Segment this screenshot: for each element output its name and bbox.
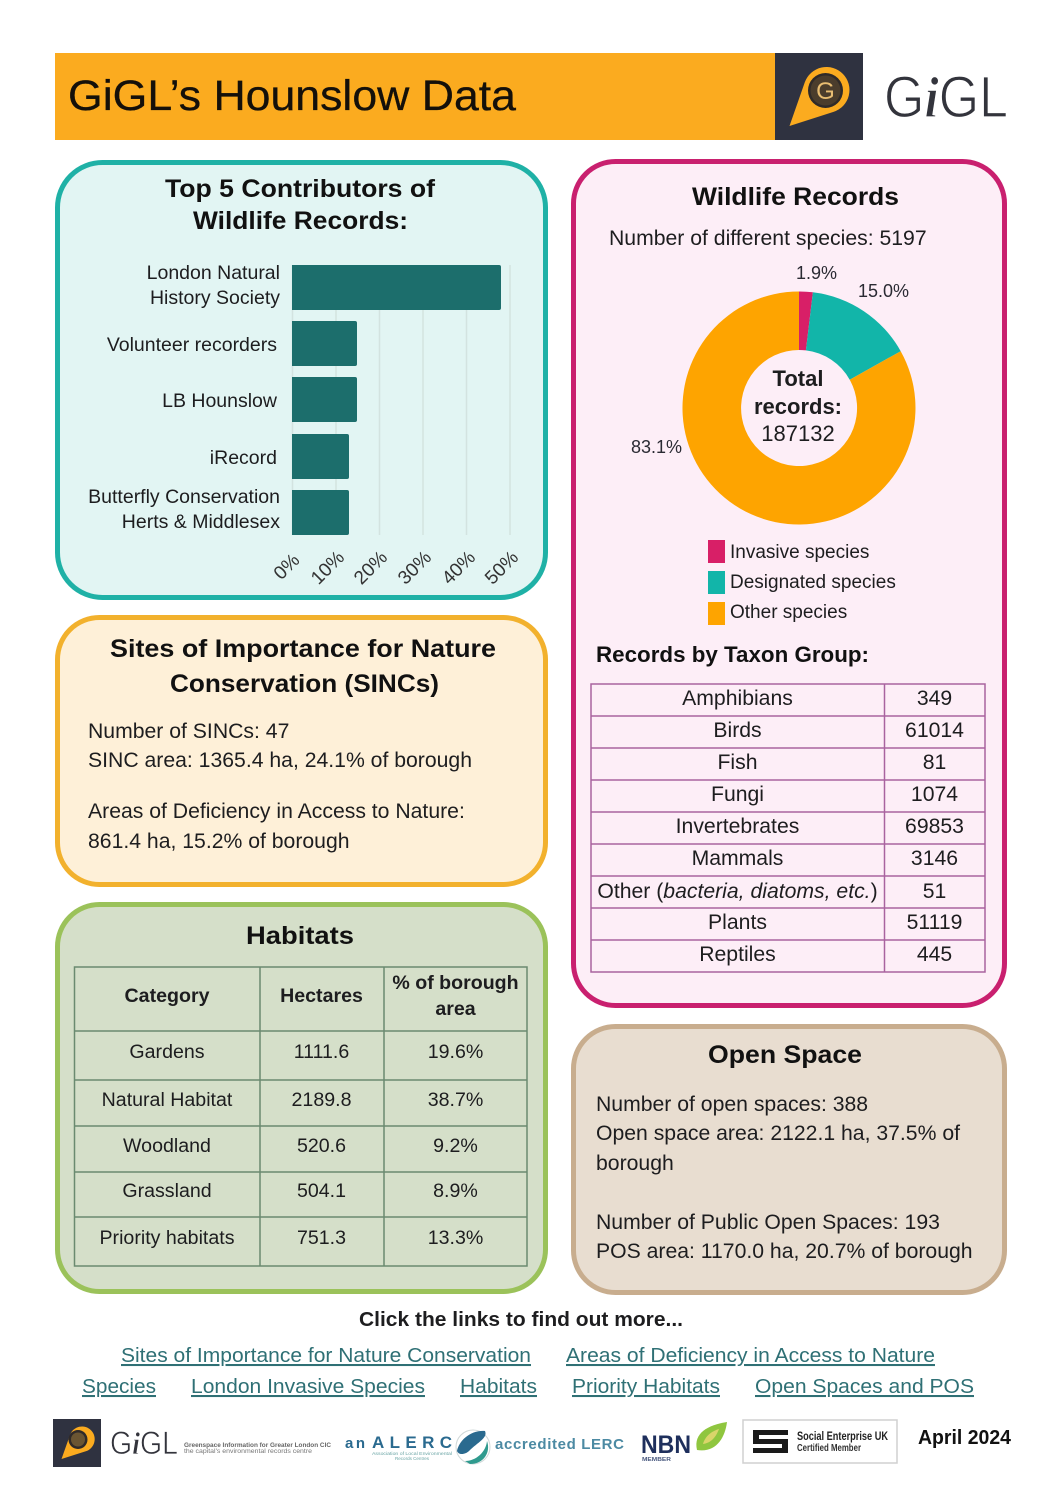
icon: GiGL map pin logo: G — [816, 78, 835, 105]
donut chart: records by species type: 15.0% — [858, 281, 909, 301]
link list: Areas of Deficiency in Access to Nature — [566, 1344, 935, 1367]
donut chart: records by species type: Total — [773, 366, 823, 391]
text: open space statistics: Number of open spaces: 388 — [596, 1093, 868, 1116]
legend: Designated species — [730, 572, 896, 593]
links heading: Click the links to find out more... — [359, 1309, 683, 1331]
bar chart: contributors: iRecord — [210, 447, 277, 469]
table: habitats: 751.3 — [297, 1227, 346, 1249]
donut chart: records by species type — [631, 263, 915, 524]
table: habitats: 19.6% — [428, 1041, 483, 1063]
table: habitats: 8.9% — [433, 1180, 478, 1202]
bar chart: contributors: Volunteer recorders — [107, 334, 277, 356]
table: habitats: area — [435, 998, 477, 1020]
logo: ALERC accreditation: Records Centres — [395, 1456, 430, 1461]
table: habitats: 504.1 — [297, 1180, 346, 1202]
table: habitats — [74, 967, 527, 1266]
heading: open space: Open Space — [708, 1041, 862, 1069]
logo: small GiGL wordmark: GiGL — [110, 1425, 178, 1461]
table: taxon groups: Invertebrates — [676, 815, 799, 838]
heading: SINCs: Conservation (SINCs) — [170, 670, 439, 698]
logo: small GiGL wordmark: the capital's environmental records centre — [184, 1449, 313, 1455]
table: taxon groups: 61014 — [905, 719, 964, 742]
link list: Sites of Importance for Nature Conservation — [121, 1344, 531, 1367]
link list: Open Spaces and POS — [755, 1375, 974, 1398]
logo: Social Enterprise UK: Certified Member — [797, 1443, 861, 1454]
logo: Social Enterprise UK — [743, 1420, 897, 1463]
link list — [82, 1344, 974, 1398]
legend — [708, 540, 896, 625]
bar chart: contributors: 20% — [350, 547, 392, 589]
logo: NBN member — [641, 1422, 727, 1463]
logo: ALERC accreditation: an — [345, 1435, 365, 1452]
heading: top 5 contributors: Wildlife Records: — [193, 207, 408, 235]
logo: GiGL wordmark: GiGL — [884, 65, 1008, 130]
table: habitats: Woodland — [123, 1135, 211, 1157]
panel: top 5 contributors — [58, 162, 546, 598]
text: SINC statistics: Number of SINCs: 47 — [88, 720, 289, 743]
date: April 2024 — [918, 1427, 1012, 1449]
table: habitats: Category — [125, 985, 210, 1007]
bar chart: contributors: 30% — [394, 547, 436, 589]
legend: Invasive species — [730, 542, 869, 563]
table: habitats: Priority habitats — [99, 1227, 235, 1249]
table: habitats: % of borough — [392, 972, 519, 994]
logo: Social Enterprise UK: Social Enterprise UK — [797, 1431, 889, 1443]
title: GiGL’s Hounslow Data — [68, 72, 516, 120]
table: taxon groups: 445 — [917, 943, 952, 966]
icon: small GiGL pin logo — [53, 1419, 101, 1467]
table: taxon groups: 81 — [923, 751, 946, 774]
bar chart: contributors: 10% — [307, 547, 349, 589]
table: habitats: Grassland — [122, 1180, 212, 1202]
donut chart: records by species type: records: — [754, 394, 842, 419]
text: SINC statistics: Areas of Deficiency in Access to Nature: — [88, 800, 465, 823]
logo: ALERC accreditation — [345, 1430, 624, 1464]
panel: SINCs — [58, 618, 546, 884]
heading: SINCs: Sites of Importance for Nature — [110, 635, 496, 663]
table: taxon groups: Mammals — [692, 847, 783, 870]
donut chart: records by species type: 187132 — [761, 421, 835, 446]
icon: GiGL map pin logo — [775, 53, 863, 140]
table: taxon groups: 3146 — [911, 847, 958, 870]
heading: top 5 contributors: Top 5 Contributors of — [165, 175, 436, 203]
bar chart: contributors: 0% — [270, 550, 304, 584]
panel: open space — [574, 1026, 1004, 1292]
bar chart: contributors — [88, 262, 523, 589]
heading: habitats: Habitats — [246, 922, 354, 950]
table: habitats: Natural Habitat — [102, 1089, 233, 1111]
heading: top 5 contributors — [165, 175, 436, 235]
table: taxon groups: 1074 — [911, 783, 958, 806]
text: species count: Number of different species: 5197 — [609, 227, 927, 250]
table: habitats: Gardens — [129, 1041, 205, 1063]
logo: ALERC accreditation: ALERC — [372, 1433, 452, 1452]
footer logos — [53, 1419, 1012, 1467]
logo: ALERC accreditation: accredited LERC — [495, 1436, 624, 1453]
table: taxon groups: Amphibians — [682, 687, 793, 710]
panel: habitats — [58, 904, 546, 1292]
logo: small GiGL wordmark — [110, 1425, 332, 1461]
text: open space statistics: borough — [596, 1152, 674, 1175]
link list: London Invasive Species — [191, 1375, 425, 1398]
donut chart: records by species type: 83.1% — [631, 437, 682, 457]
bar chart: contributors: LB Hounslow — [162, 390, 278, 412]
heading: wildlife records: Wildlife Records — [692, 183, 899, 211]
links section — [82, 1309, 974, 1398]
table: habitats: 38.7% — [428, 1089, 483, 1111]
legend: Other species — [730, 602, 847, 623]
logo: ALERC accreditation: Association of Local Environmental — [372, 1451, 452, 1456]
bar chart: contributors: History Society — [150, 287, 280, 309]
table: taxon groups: Fungi — [711, 783, 764, 806]
table: taxon groups: 349 — [917, 687, 952, 710]
table: taxon groups: Plants — [708, 911, 767, 934]
text: SINC statistics: 861.4 ha, 15.2% of borough — [88, 830, 350, 853]
bar chart: contributors: Butterfly Conservation — [88, 486, 280, 508]
bar chart: contributors: London Natural — [147, 262, 280, 284]
table: taxon groups: 51 — [923, 880, 946, 903]
text: SINC statistics — [88, 720, 472, 853]
link list: Priority Habitats — [572, 1375, 720, 1398]
heading: SINCs — [110, 635, 496, 698]
table: habitats: 13.3% — [428, 1227, 483, 1249]
table: habitats: 9.2% — [433, 1135, 478, 1157]
table: habitats: 1111.6 — [294, 1041, 349, 1063]
bar chart: contributors: 50% — [481, 547, 523, 589]
table: habitats: 2189.8 — [292, 1089, 352, 1111]
text: SINC statistics: SINC area: 1365.4 ha, 24.1% of borough — [88, 749, 472, 772]
bar chart: contributors: 40% — [438, 547, 480, 589]
bar chart: contributors: Herts & Middlesex — [122, 511, 280, 533]
text: open space statistics: POS area: 1170.0 ha, 20.7% of borough — [596, 1240, 973, 1263]
table: taxon groups: 69853 — [905, 815, 964, 838]
text: open space statistics: Number of Public Open Spaces: 193 — [596, 1211, 940, 1234]
table: taxon groups: Reptiles — [699, 943, 776, 966]
logo: NBN member: NBN — [641, 1431, 691, 1459]
table: habitats: 520.6 — [297, 1135, 346, 1157]
logo: small GiGL wordmark: Greenspace Information for Greater London CIC — [184, 1443, 332, 1449]
header banner — [55, 53, 776, 140]
table: taxon groups: Fish — [717, 751, 758, 774]
text: open space statistics — [596, 1093, 973, 1263]
table: taxon groups: 51119 — [907, 911, 962, 934]
table: taxon groups: Other (bacteria, diatoms, etc.) — [597, 880, 878, 903]
heading: records by taxon group: Records by Taxon Group: — [596, 642, 869, 667]
panel: wildlife records — [574, 162, 1004, 1006]
text: open space statistics: Open space area: 2122.1 ha, 37.5% of — [596, 1122, 960, 1145]
table: taxon groups: Birds — [713, 719, 762, 742]
table: habitats: Hectares — [280, 985, 363, 1007]
table: taxon groups — [591, 684, 985, 972]
link list: Species — [82, 1375, 156, 1398]
link list: Habitats — [460, 1375, 537, 1398]
donut chart: records by species type: 1.9% — [796, 263, 837, 283]
logo: NBN member: MEMBER — [642, 1457, 671, 1463]
